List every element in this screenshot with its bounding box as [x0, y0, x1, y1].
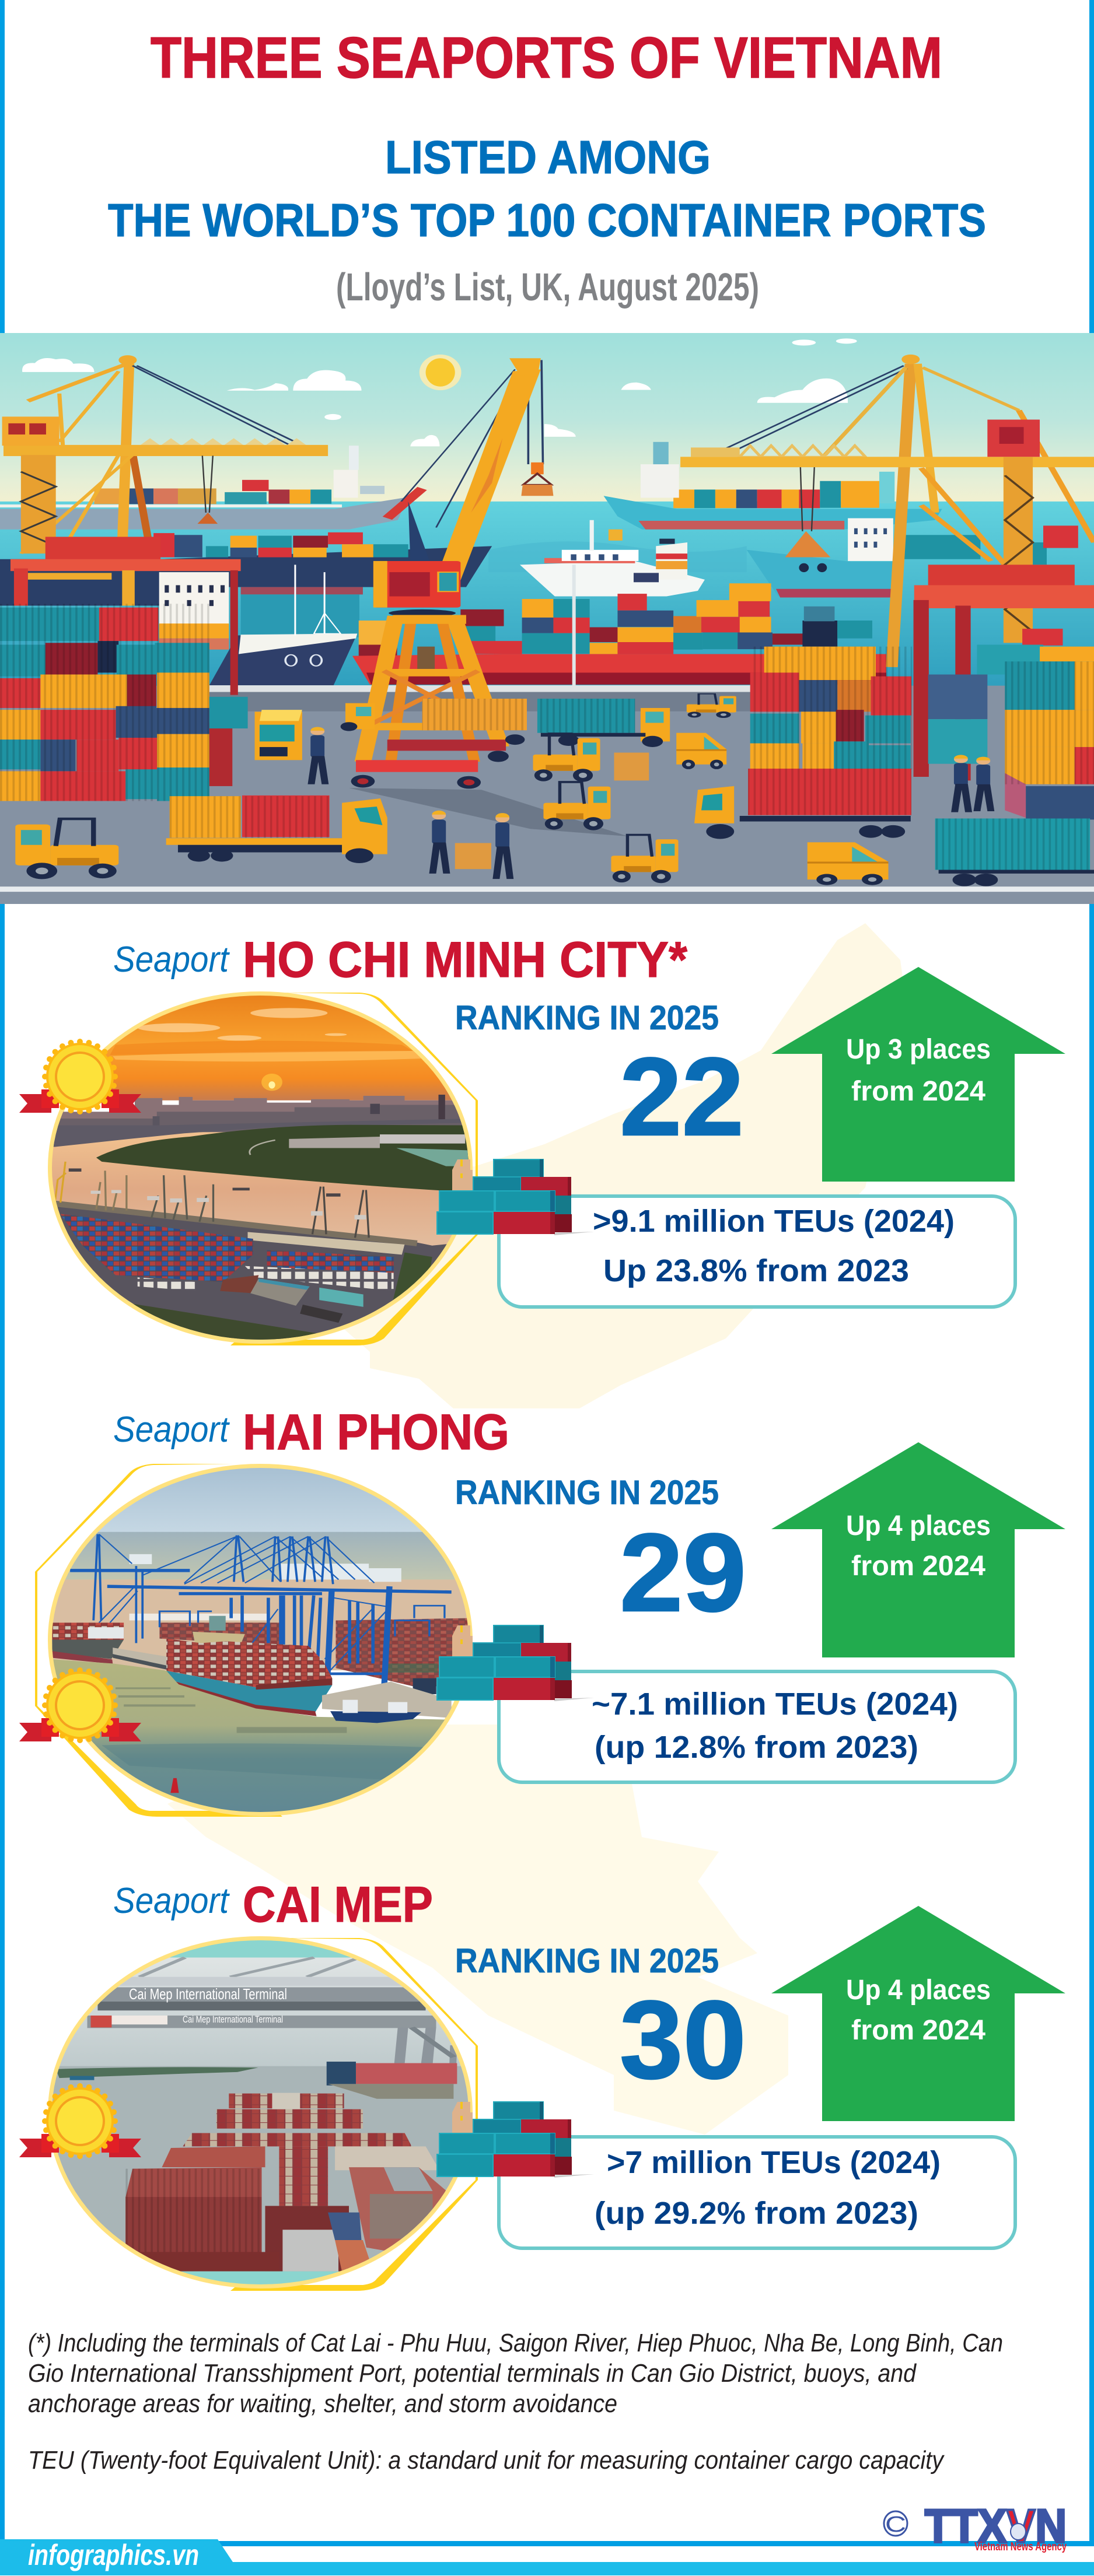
- section: Hai Phong: [19, 1404, 1065, 1820]
- right blue ship: [747, 518, 1078, 597]
- navy small ship: [209, 565, 357, 685]
- ranking label: RANKING IN 2025: [455, 999, 719, 1037]
- heading: port name: HO CHI MINH CITY*: [243, 932, 687, 988]
- white crane cabins: [130, 1554, 401, 1582]
- heading: Seaport label: Seaport: [113, 940, 230, 980]
- sky: [0, 333, 1094, 508]
- container stack icon: [437, 1625, 594, 1701]
- copyright mark: C: [885, 2512, 906, 2537]
- central crane: [351, 358, 553, 788]
- left crane: [2, 355, 328, 553]
- stat box: [499, 1196, 1015, 1307]
- tugboats: [330, 1711, 421, 1723]
- city skyline: [47, 1095, 476, 1141]
- decorative yellow hexagon frame: [230, 1938, 478, 2291]
- photo: Cai Mep container ship deck: [42, 1937, 488, 2289]
- quay: [113, 1648, 168, 1669]
- container stack icon: [437, 1159, 594, 1235]
- quay: [55, 1204, 417, 1243]
- stat text line 2: (up 29.2% from 2023): [595, 2196, 918, 2231]
- ranking number: 22: [620, 1035, 744, 1159]
- buoy: [170, 1778, 179, 1793]
- clouds: [22, 338, 857, 446]
- back ship right: [604, 442, 942, 530]
- stat box: [499, 2137, 1015, 2248]
- arrow: up 3 places: from 2024: [851, 1076, 985, 1107]
- footnote text: [28, 2329, 1003, 2418]
- right red gantry: [914, 565, 1094, 780]
- bottom centre truck: [166, 795, 387, 863]
- forklifts: [15, 694, 736, 883]
- photo: Hai Phong container port with blue cranes: [47, 1464, 478, 1820]
- title: THREE SEAPORTS OF VIETNAM: [151, 25, 942, 90]
- arrow: up 4 places: [771, 1442, 1065, 1657]
- arrow: up 4 places: Up 4 places: [846, 1510, 991, 1541]
- arrow: up 4 places: from 2024: [851, 2015, 985, 2046]
- ground and quay: [0, 685, 1094, 905]
- left red gantry: [11, 537, 241, 695]
- blue quay cranes: [70, 1534, 452, 1691]
- photo: Ho Chi Minh City port at sunset: [47, 991, 478, 1347]
- river: [47, 1132, 478, 1246]
- green island: [96, 1125, 471, 1191]
- right page border: [1089, 0, 1094, 2546]
- background map: southern Vietnam silhouette: [292, 923, 907, 1408]
- subtitle line 1: LISTED AMONG: [385, 131, 711, 183]
- medal: [19, 2086, 141, 2157]
- stat text line 2: (up 12.8% from 2023): [595, 1730, 918, 1765]
- heading: port name: CAI MEP: [243, 1877, 433, 1933]
- footnote text: Gio International Transshipment Port, potential terminals in Can Gio District, buoys, and: [28, 2359, 917, 2388]
- decorative yellow hexagon frame: [230, 993, 478, 1345]
- cranes: [55, 1162, 369, 1238]
- arrow: up 3 places: Up 3 places: [846, 1034, 991, 1065]
- banner illustration: port scene: [0, 333, 1094, 905]
- sea: [0, 502, 1094, 688]
- ship hull: [166, 1671, 332, 1712]
- main container ship: [193, 1632, 245, 1648]
- footnote text: anchorage areas for waiting, shelter, and storm avoidance: [28, 2389, 617, 2418]
- workers and cargo: [307, 727, 994, 879]
- stat text line 1: >7 million TEUs (2024): [607, 2145, 941, 2180]
- mid containers on red ship: [359, 583, 872, 656]
- ranking number: 30: [620, 1978, 746, 2102]
- white cruise ship: [520, 520, 705, 597]
- container stack icon: [437, 2102, 594, 2178]
- website label: infographics.vn: [28, 2539, 199, 2571]
- teal container truck: [935, 818, 1094, 886]
- land and yard: [47, 1579, 478, 1670]
- warehouses: [220, 1275, 258, 1294]
- copyright mark: [884, 2511, 907, 2537]
- left page border: [0, 0, 5, 2539]
- TEU definition: TEU (Twenty-foot Equivalent Unit): a standard unit for measuring container cargo capacity: [28, 2446, 945, 2475]
- stat text line 1: ~7.1 million TEUs (2024): [592, 1687, 958, 1722]
- back ship left: [0, 446, 408, 530]
- container yard: [61, 1214, 253, 1282]
- water: [47, 1659, 478, 1820]
- section: Ho Chi Minh City: [19, 932, 1065, 1347]
- section: Cai Mep: [19, 1877, 1065, 2291]
- photo frame ring: [50, 994, 470, 1341]
- vans: [676, 733, 889, 885]
- decorative yellow hexagon frame: [35, 1464, 282, 1817]
- medal: [19, 1670, 141, 1741]
- stat text line 1: >9.1 million TEUs (2024): [593, 1204, 955, 1239]
- footer bars: [0, 2539, 1094, 2575]
- stat box: [499, 1671, 1015, 1782]
- right dock: [322, 1682, 452, 1718]
- left ship: [52, 1622, 124, 1640]
- arrow: up 4 places: from 2024: [851, 1551, 985, 1582]
- distant sea haze: [495, 541, 747, 549]
- port yard ground: [47, 1201, 476, 1347]
- right crane: [680, 355, 1094, 667]
- vehicles: mid trucks: [255, 699, 670, 760]
- red container truck: [694, 769, 911, 839]
- heading: Seaport label: Seaport: [113, 1881, 230, 1921]
- photo frame ring: [50, 1939, 470, 2286]
- crane sign text: Cai Mep International Terminal: [129, 1985, 287, 2003]
- background map: lower silhouette: [167, 1725, 788, 2135]
- subtitle line 2: THE WORLD’S TOP 100 CONTAINER PORTS: [108, 194, 986, 246]
- stat text line 2: Up 23.8% from 2023: [603, 1253, 909, 1288]
- arrow: up 4 places: [771, 1906, 1065, 2121]
- source line: (Lloyd’s List, UK, August 2025): [336, 265, 759, 309]
- crane sign text, rear crane: Cai Mep International Terminal: [183, 2014, 283, 2025]
- sunset sky: [47, 991, 478, 1101]
- mid container ship, left: [0, 532, 492, 650]
- arrow: up 4 places: Up 4 places: [846, 1975, 991, 2006]
- sky: [47, 1464, 478, 1534]
- ranking label: RANKING IN 2025: [455, 1942, 719, 1980]
- ranking label: RANKING IN 2025: [455, 1474, 719, 1512]
- big red ship hull: [352, 654, 886, 685]
- arrow: up 3 places: [771, 967, 1065, 1182]
- sun: [420, 355, 462, 390]
- TTXVN logo: TTXVN: [925, 2500, 1067, 2553]
- ranking number: 29: [620, 1511, 746, 1635]
- shoreline vegetation: [124, 1302, 322, 1347]
- left container stacks: [0, 604, 248, 801]
- far water: [47, 1532, 478, 1586]
- heading: Seaport label: Seaport: [113, 1410, 230, 1450]
- medal: [19, 1042, 141, 1113]
- photo frame ring: [50, 1466, 470, 1814]
- right container stacks: [750, 644, 1094, 819]
- heading: port name: HAI PHONG: [243, 1404, 509, 1460]
